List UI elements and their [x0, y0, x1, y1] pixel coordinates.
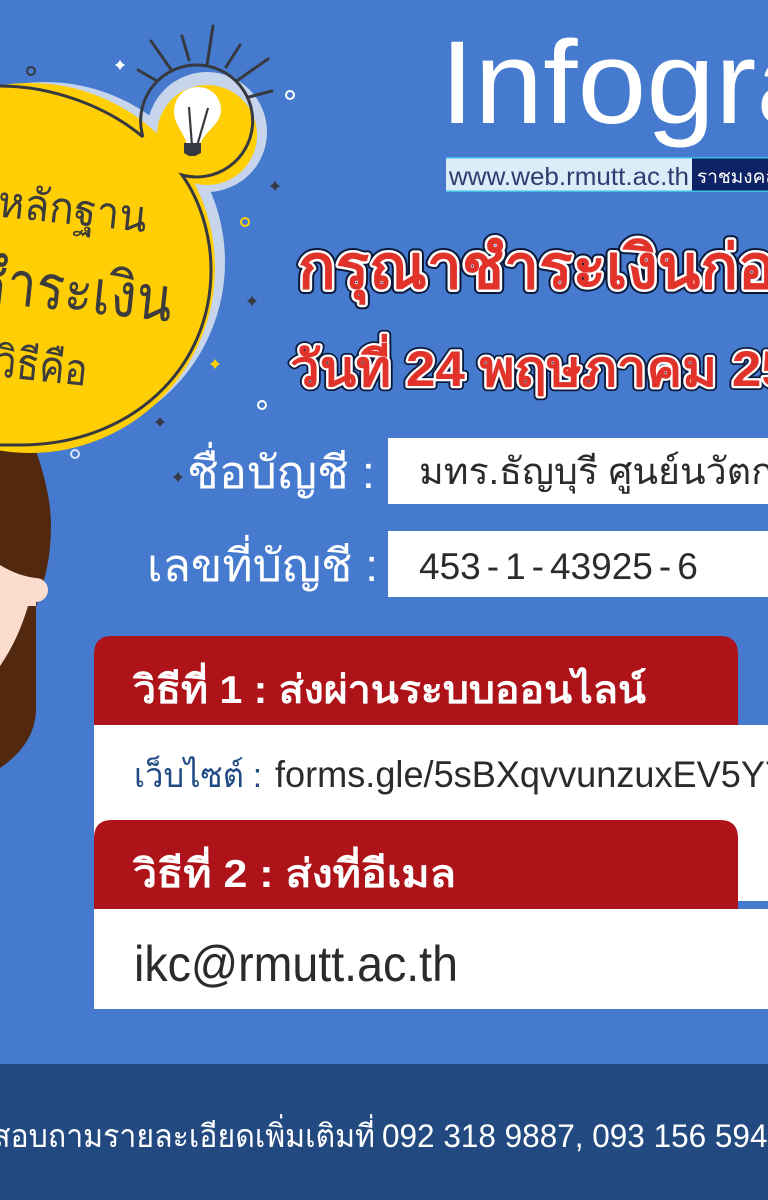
bubble text: หลักฐาน: [0, 178, 150, 243]
method 2 heading: วิธีที่ 2 : ส่งที่อีเมล: [132, 846, 456, 896]
website banner: [446, 157, 768, 192]
character: hair and face: [0, 440, 51, 768]
method 1 heading: วิธีที่ 1 : ส่งผ่านระบบออนไลน์: [132, 662, 646, 712]
account number row: เลขที่บัญชี :: [147, 534, 378, 591]
decorative sparkles: [27, 60, 294, 482]
footer contact text: [0, 1114, 768, 1154]
account name row: ชื่อบัญชี :: [187, 441, 375, 498]
website banner: www.web.rmutt.ac.th: [448, 163, 689, 191]
footer contact text: สอบถามรายละเอียดเพิ่มเติมที่: [0, 1114, 375, 1154]
account number row: 453-1-43925-6: [419, 546, 698, 587]
method 2 email: ikc@rmutt.ac.th: [134, 936, 458, 992]
footer band: [0, 1064, 768, 1200]
panel: yellow idea speech bubble: [0, 65, 267, 453]
panel: method 1: [94, 636, 768, 901]
panel: method 2: [94, 820, 768, 1009]
account name row: [187, 438, 768, 504]
bubble text: [0, 178, 176, 396]
account number row: [147, 531, 768, 597]
method 1 website label: เว็บไซต์ :: [134, 755, 262, 795]
icon: light bulb: [138, 26, 272, 156]
